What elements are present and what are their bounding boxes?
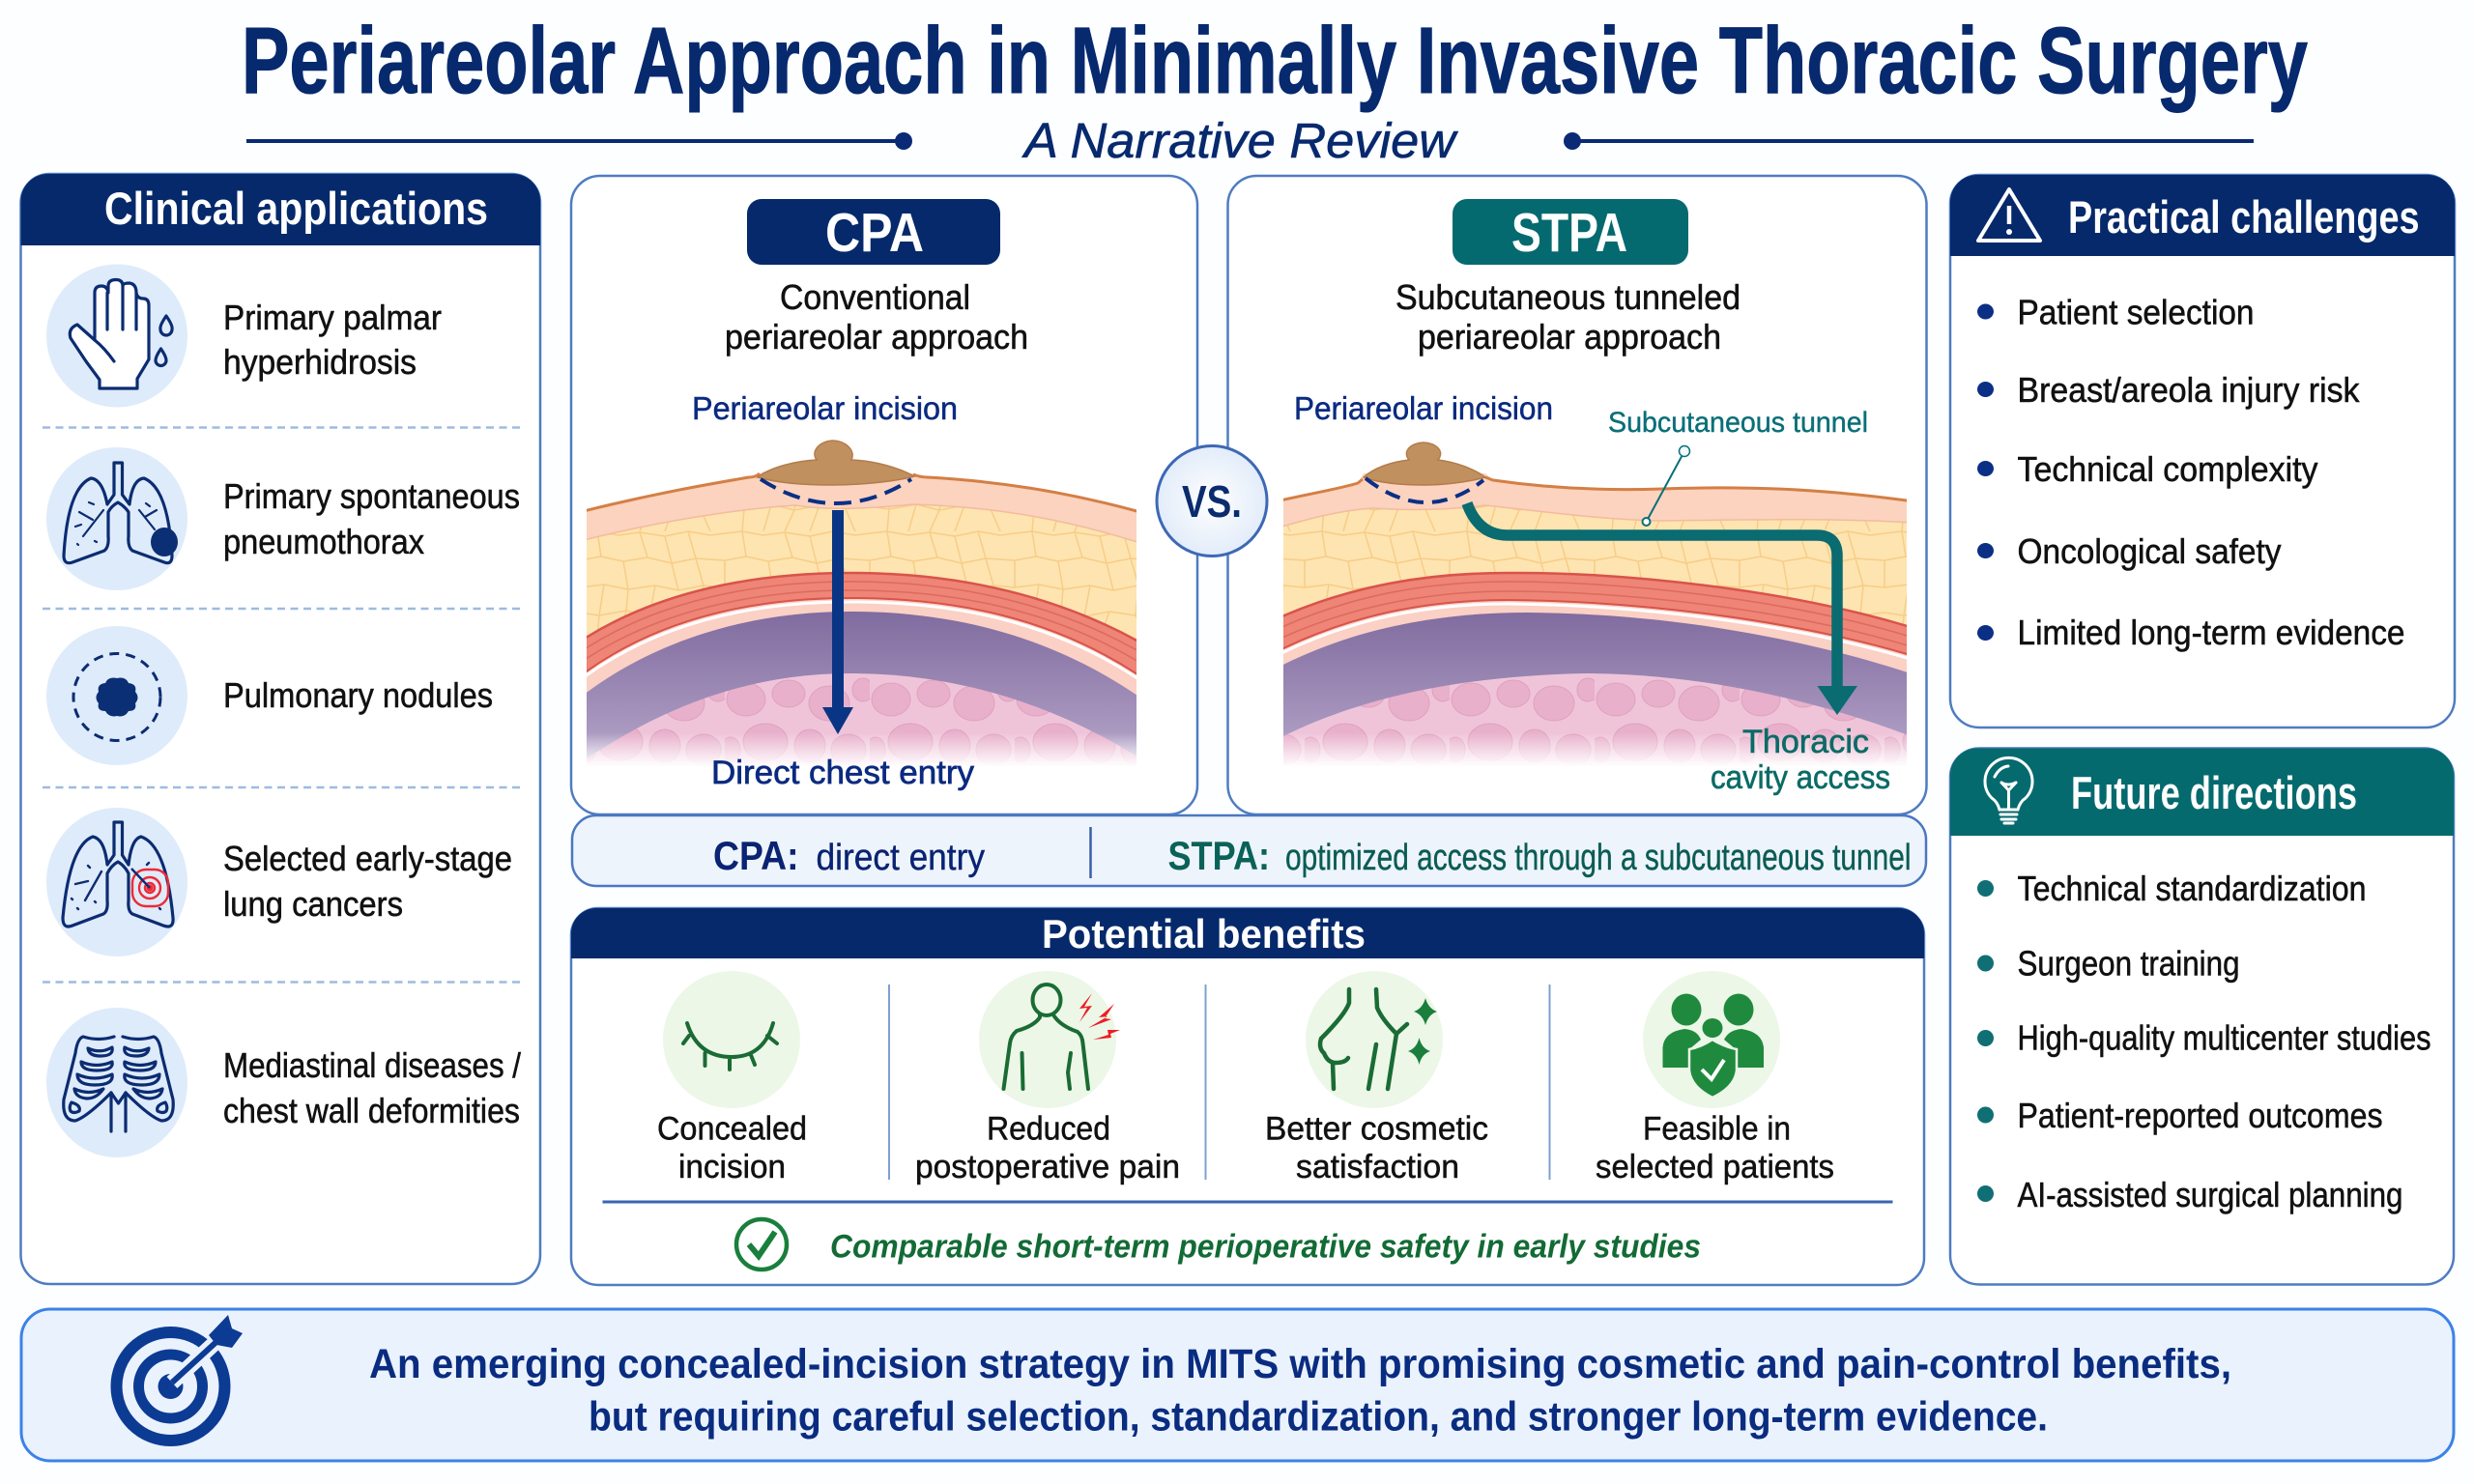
panel: clinical applications (21, 174, 540, 1284)
illustration: STPA tissue cross-section (1276, 442, 1913, 776)
label: primary palmar hyperhidrosis: hyperhidrosis (223, 342, 417, 382)
skin layer (587, 471, 1136, 541)
incision: dashed line (761, 479, 911, 503)
conclusion text: An emerging concealed-incision strategy in MITS with promising cosmetic and pain-control benefits, (369, 1341, 2231, 1387)
badge: CPA: CPA (825, 202, 924, 264)
areola and nipple (1364, 442, 1485, 485)
label: thoracic cavity access (1711, 724, 1890, 796)
label: thoracic cavity access: Thoracic (1742, 724, 1869, 760)
label: subcutaneous tunnel with pointer: Subcutaneous tunnel (1608, 407, 1868, 439)
icon: patients with shield (1643, 971, 1780, 1108)
heading: practical challenges (1950, 175, 2455, 256)
CPA summary: CPA: (713, 833, 798, 878)
label: reduced postoperative pain: Reduced (987, 1111, 1110, 1148)
list: challenges: Breast/areola injury risk (2018, 370, 2360, 410)
list: challenges (1977, 292, 2404, 652)
badge: STPA: STPA (1511, 202, 1627, 264)
label: primary spontaneous pneumothorax: pneumothorax (223, 522, 424, 561)
CPA summary: direct entry (816, 838, 985, 878)
chest cavity (587, 612, 1136, 758)
list: future directions: Surgeon training (2018, 943, 2240, 984)
label: primary spontaneous pneumothorax (223, 476, 520, 561)
label: subcutaneous tunnel with pointer (1608, 407, 1868, 526)
list: challenges: Patient selection (2018, 292, 2254, 332)
icon: closed eye (663, 971, 800, 1108)
icon: person with pain (979, 971, 1120, 1108)
muscle layer (587, 572, 1136, 672)
lung tissue (1283, 673, 1907, 762)
icon: rib cage (46, 1008, 187, 1157)
label: primary palmar hyperhidrosis: Primary palmar (223, 298, 442, 337)
areola and nipple (758, 441, 914, 485)
label: better cosmetic satisfaction: satisfaction (1296, 1149, 1459, 1185)
label: feasible in selected patients: selected patients (1596, 1149, 1834, 1185)
label: primary spontaneous pneumothorax: Primary spontaneous (223, 476, 520, 516)
heading: future directions (1950, 748, 2454, 836)
pleura layer (1283, 599, 1907, 672)
list: future directions: AI-assisted surgical planning (2018, 1175, 2402, 1214)
STPA summary: STPA: (1167, 833, 1270, 878)
icon: lungs with lung cancer target (46, 808, 187, 956)
label: selected early-stage lung cancers (223, 839, 512, 924)
lung tissue (587, 673, 1136, 762)
subtitle: subcutaneous tunneled periareolar approach: periareolar approach (1418, 317, 1721, 357)
heading: clinical applications: Clinical applications (104, 183, 488, 234)
label: mediastinal diseases / chest wall deformities: Mediastinal diseases / (223, 1045, 521, 1085)
subtitle: A Narrative Review (1021, 113, 1458, 168)
label: concealed incision: Concealed (657, 1111, 807, 1148)
label: selected early-stage lung cancers: lung cancers (223, 884, 403, 924)
label: direct chest entry: Direct chest entry (711, 755, 974, 791)
chest cavity (1283, 613, 1907, 736)
icon: warning triangle (1978, 189, 2040, 241)
subtitle: subcutaneous tunneled periareolar approach (1395, 277, 1740, 357)
label: better cosmetic satisfaction: Better cosmetic (1265, 1111, 1488, 1148)
subtitle: conventional periareolar approach: Conventional (780, 277, 970, 317)
list: future directions: Patient-reported outcomes (2018, 1096, 2383, 1135)
label: thoracic cavity access: cavity access (1711, 759, 1890, 796)
label: mediastinal diseases / chest wall deformities (223, 1045, 521, 1130)
VS badge: VS. (1182, 476, 1242, 527)
label: selected early-stage lung cancers: Selected early-stage (223, 839, 512, 878)
title block (242, 8, 2308, 168)
fat layer (1283, 504, 1907, 624)
label: better cosmetic satisfaction (1265, 1111, 1488, 1185)
label: pulmonary nodules: Pulmonary nodules (223, 675, 493, 715)
right title rule (1564, 132, 2254, 150)
skin layer (1283, 473, 1907, 526)
panel: CPA (571, 176, 1197, 814)
subtitle: conventional periareolar approach: periareolar approach (725, 317, 1028, 357)
subtitle: subcutaneous tunneled periareolar approach: Subcutaneous tunneled (1395, 277, 1740, 317)
fade (1283, 735, 1907, 766)
pleura layer (587, 597, 1136, 696)
conclusion banner (21, 1309, 2454, 1461)
list: future directions: Technical standardization (2018, 869, 2366, 908)
conclusion text (369, 1341, 2231, 1440)
arrow: subcutaneous tunnel path (1467, 503, 1857, 715)
icon: pulmonary nodule (46, 626, 187, 765)
panel: STPA (1227, 176, 1927, 814)
left title rule (246, 132, 912, 150)
STPA summary: optimized access through a subcutaneous tunnel (1285, 838, 1912, 878)
subtitle: conventional periareolar approach (725, 277, 1028, 357)
skin surface line (580, 473, 1140, 512)
panel: future directions (1950, 748, 2454, 1285)
heading: future directions: Future directions (2071, 767, 2357, 818)
label: feasible in selected patients: Feasible in (1643, 1111, 1791, 1148)
label: reduced postoperative pain (915, 1111, 1180, 1185)
icon: body contour with sparkles (1306, 971, 1443, 1108)
icon: hand with sweat drops (46, 265, 187, 408)
arrow: direct entry (822, 510, 853, 734)
list: challenges: Limited long-term evidence (2018, 613, 2404, 652)
safety note: Comparable short-term perioperative safety in early studies (830, 1229, 1701, 1266)
list: challenges: Technical complexity (2018, 449, 2317, 489)
icon: lungs with pneumothorax (46, 447, 187, 590)
panel: potential benefits (571, 908, 1924, 1285)
label: periareolar incision: Periareolar incision (692, 390, 958, 426)
icon: check circle (736, 1219, 787, 1270)
icon: light bulb (1985, 757, 2032, 823)
fade (587, 735, 1136, 766)
label: reduced postoperative pain: postoperative pain (915, 1149, 1180, 1185)
list: future directions (1977, 869, 2431, 1214)
badge: CPA (747, 199, 1000, 265)
incision: dashed line (1366, 478, 1483, 502)
list: challenges: Oncological safety (2018, 531, 2281, 571)
label: feasible in selected patients (1596, 1111, 1834, 1185)
heading: potential benefits: Potential benefits (1042, 911, 1366, 956)
label: concealed incision: incision (678, 1149, 786, 1185)
icon: target with arrow (116, 1315, 243, 1441)
heading: potential benefits (571, 908, 1924, 958)
muscle layer (1283, 572, 1907, 653)
comparison strip (572, 815, 1926, 886)
label: primary palmar hyperhidrosis (223, 298, 442, 382)
fat layer (587, 503, 1136, 640)
VS badge (1157, 446, 1267, 556)
illustration: CPA tissue cross-section (580, 441, 1145, 776)
skin surface line (1276, 477, 1913, 501)
panel: practical challenges (1950, 175, 2455, 728)
heading: clinical applications (21, 174, 540, 245)
label: concealed incision (657, 1111, 807, 1185)
label: mediastinal diseases / chest wall deformities: chest wall deformities (223, 1091, 520, 1130)
CPA summary (713, 833, 985, 878)
STPA summary (1167, 833, 1912, 878)
badge: STPA (1453, 199, 1688, 265)
conclusion text: but requiring careful selection, standardization, and stronger long-term evidence. (589, 1393, 2048, 1440)
label: periareolar incision: Periareolar incision (1294, 390, 1553, 426)
